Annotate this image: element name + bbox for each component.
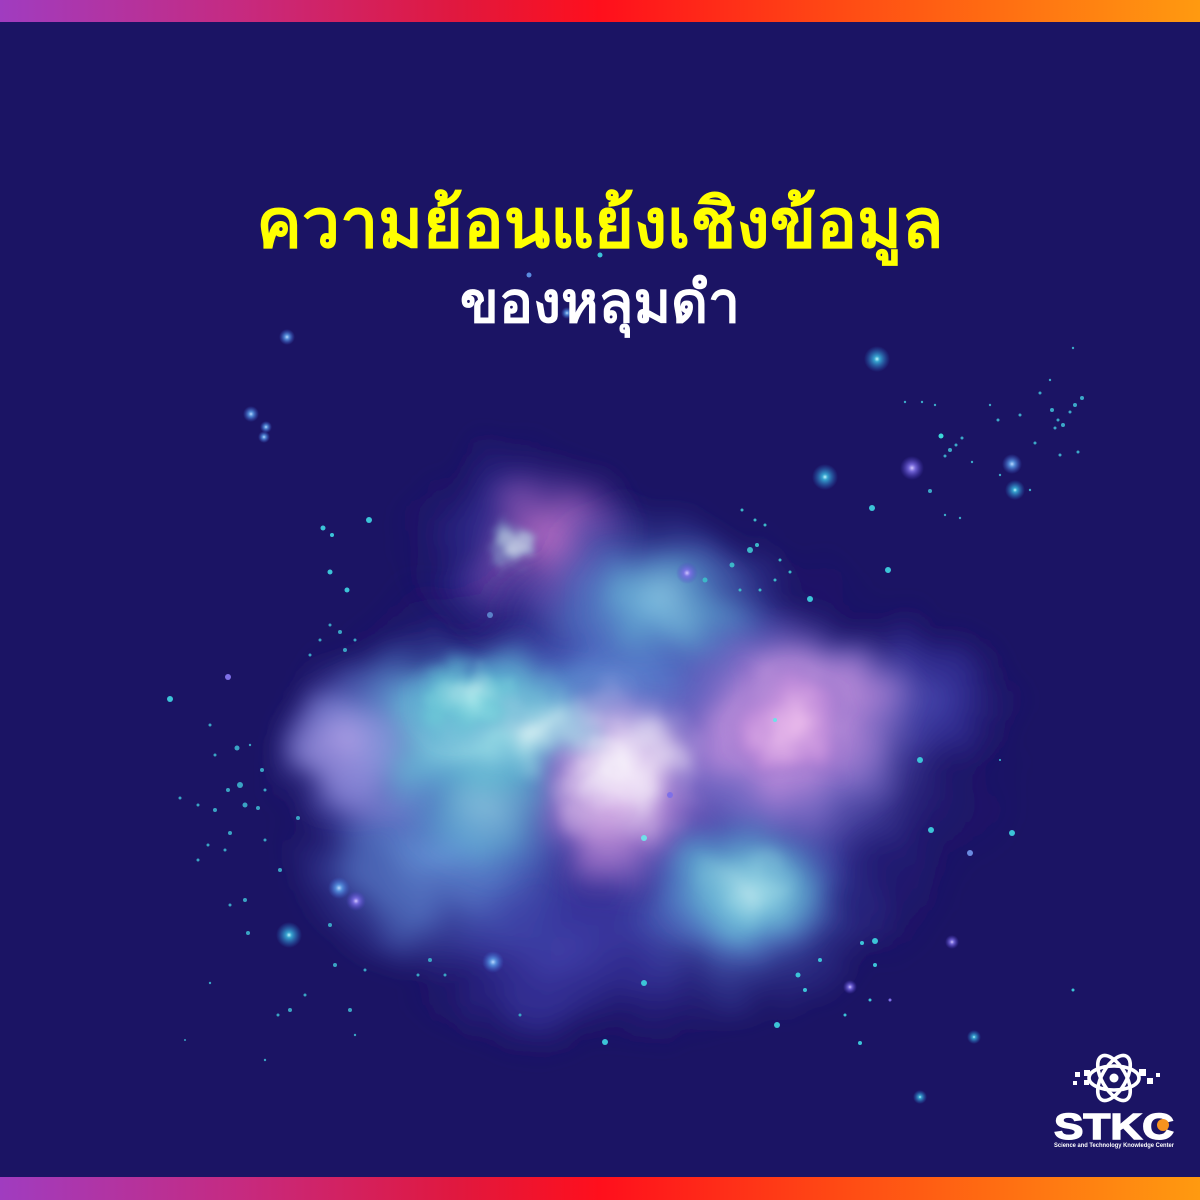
nebula upper purple cloud — [405, 430, 635, 650]
nebula white highlights — [400, 655, 860, 923]
star cluster near top of nebula — [702, 508, 792, 592]
nebula main body base — [265, 500, 1020, 1060]
logo tagline: Science and Technology Knowledge Center — [1054, 1143, 1175, 1149]
top gradient bar — [0, 0, 1200, 22]
nebula upper cloud core highlight — [420, 517, 655, 815]
title line 2: ของหลุมดำ — [460, 271, 740, 335]
star cluster upper right — [904, 347, 1084, 519]
stars over nebula — [487, 612, 777, 841]
logo wordmark: STKC — [1054, 1106, 1174, 1147]
logo accent dot — [1157, 1119, 1169, 1131]
star cluster left — [178, 624, 522, 1061]
nebula bright core clouds — [275, 535, 915, 970]
icon: atom emblem — [1073, 1050, 1160, 1106]
logo: STKC — [1054, 1054, 1175, 1149]
title line 1: ความย้อนแย้งเชิงข้อมูล — [256, 186, 944, 262]
bottom gradient bar — [0, 1177, 1200, 1200]
large glowing stars — [243, 307, 1025, 1104]
small scattered stars — [167, 252, 1074, 1045]
